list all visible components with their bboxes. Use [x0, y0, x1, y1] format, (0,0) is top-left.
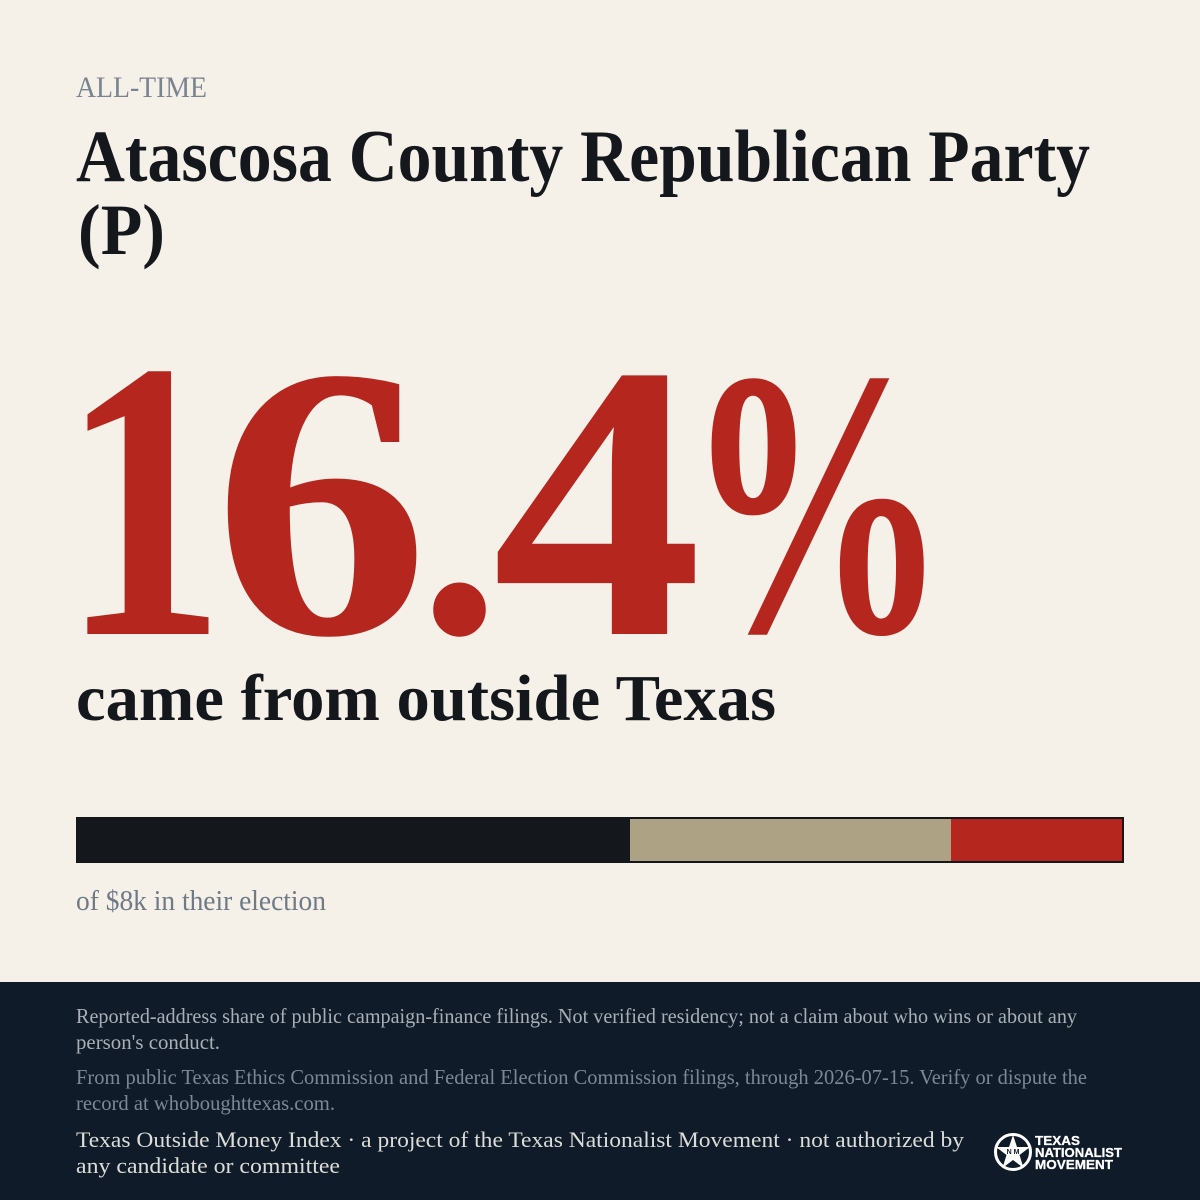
footer disclaimer: person's conduct.: [76, 1030, 220, 1054]
big percentage figure: .: [419, 334, 500, 705]
footer source note: From public Texas Ethics Commission and Federal Election Commission filings, through 2026-07-15. Verify or dispute the: [76, 1065, 1087, 1089]
footer panel: [0, 982, 1200, 1200]
title: (P): [78, 190, 165, 270]
footer source note: record at whoboughttexas.com.: [76, 1091, 335, 1115]
title: [76, 116, 1090, 270]
logo wordmark: MOVEMENT: [1035, 1157, 1113, 1172]
logo: Texas Nationalist Movement: [996, 1133, 1122, 1172]
footer attribution: any candidate or committee: [76, 1153, 340, 1178]
stacked share bar: [76, 817, 1124, 863]
title: Atascosa County Republican Party: [76, 116, 1090, 198]
footer attribution: Texas Outside Money Index · a project of the Texas Nationalist Movement · not authorized by: [76, 1127, 964, 1152]
big percentage figure: 4: [492, 285, 703, 720]
logo wordmark: NATIONALIST: [1035, 1145, 1122, 1160]
subheading: came from outside Texas: [76, 662, 776, 735]
footer disclaimer: [76, 1004, 1077, 1054]
big percentage figure: 1: [61, 280, 226, 720]
icon: star in circle: N M: [1007, 1149, 1020, 1156]
footer disclaimer: Reported-address share of public campaign-finance filings. Not verified residency; not a claim about who wins or about any: [76, 1004, 1077, 1028]
bar caption: of $8k in their election: [76, 885, 326, 917]
big percentage figure: [61, 280, 949, 720]
big percentage figure: 6: [213, 287, 429, 717]
logo wordmark: [1035, 1133, 1122, 1172]
big percentage figure: %: [684, 292, 949, 713]
logo wordmark: TEXAS: [1035, 1133, 1080, 1148]
footer source note: [76, 1065, 1087, 1115]
eyebrow label: ALL-TIME: [76, 71, 207, 104]
footer attribution: [76, 1127, 964, 1178]
